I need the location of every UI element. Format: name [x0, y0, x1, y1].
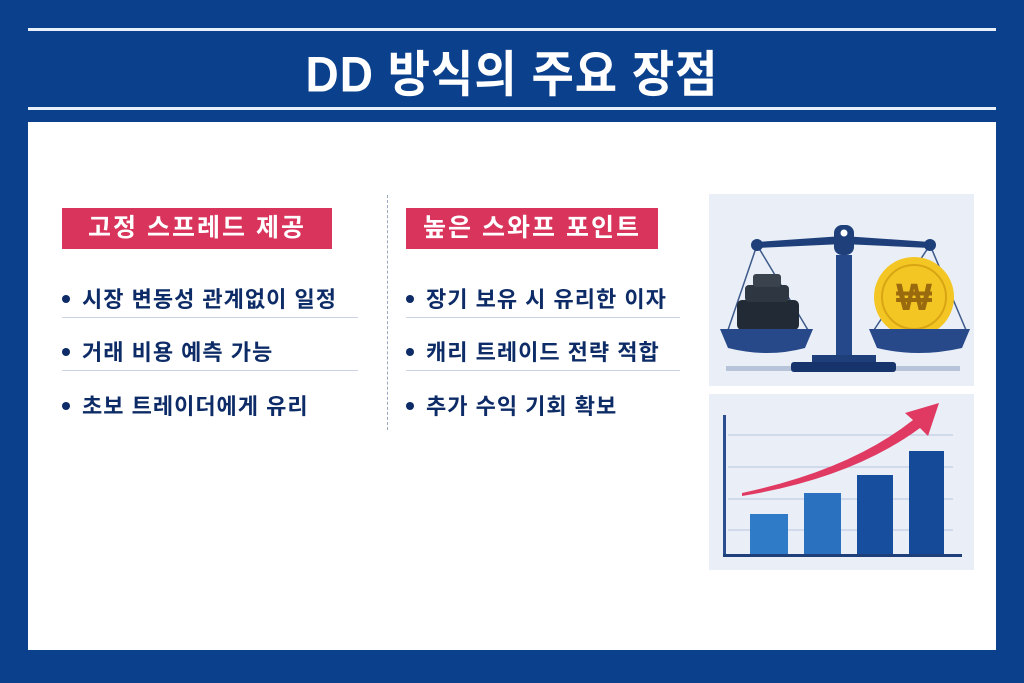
bullet 2: 캐리 트레이드 전략 적합 — [426, 340, 660, 365]
illustration: balance scale — [709, 194, 974, 386]
heading: fixed spread — [62, 208, 332, 249]
list: swap points — [406, 287, 680, 419]
bullet 3: 추가 수익 기회 확보 — [426, 394, 617, 419]
illustration: balance scale: ₩ — [896, 277, 932, 319]
bullet 2: 거래 비용 예측 가능 — [82, 340, 273, 365]
divider: dashed vertical — [387, 195, 388, 430]
heading: fixed spread: 고정 스프레드 제공 — [88, 214, 306, 242]
list: fixed spread — [62, 287, 358, 419]
panel: main content — [28, 122, 996, 650]
title: DD 방식의 주요 장점 — [305, 46, 719, 102]
bullet 3: 초보 트레이더에게 유리 — [82, 394, 309, 419]
heading: swap points — [406, 208, 658, 249]
bullet 1: 장기 보유 시 유리한 이자 — [426, 287, 667, 312]
chart: rising bar chart — [709, 394, 974, 570]
heading: swap points: 높은 스와프 포인트 — [423, 214, 641, 242]
bullet 1: 시장 변동성 관계없이 일정 — [82, 287, 337, 312]
